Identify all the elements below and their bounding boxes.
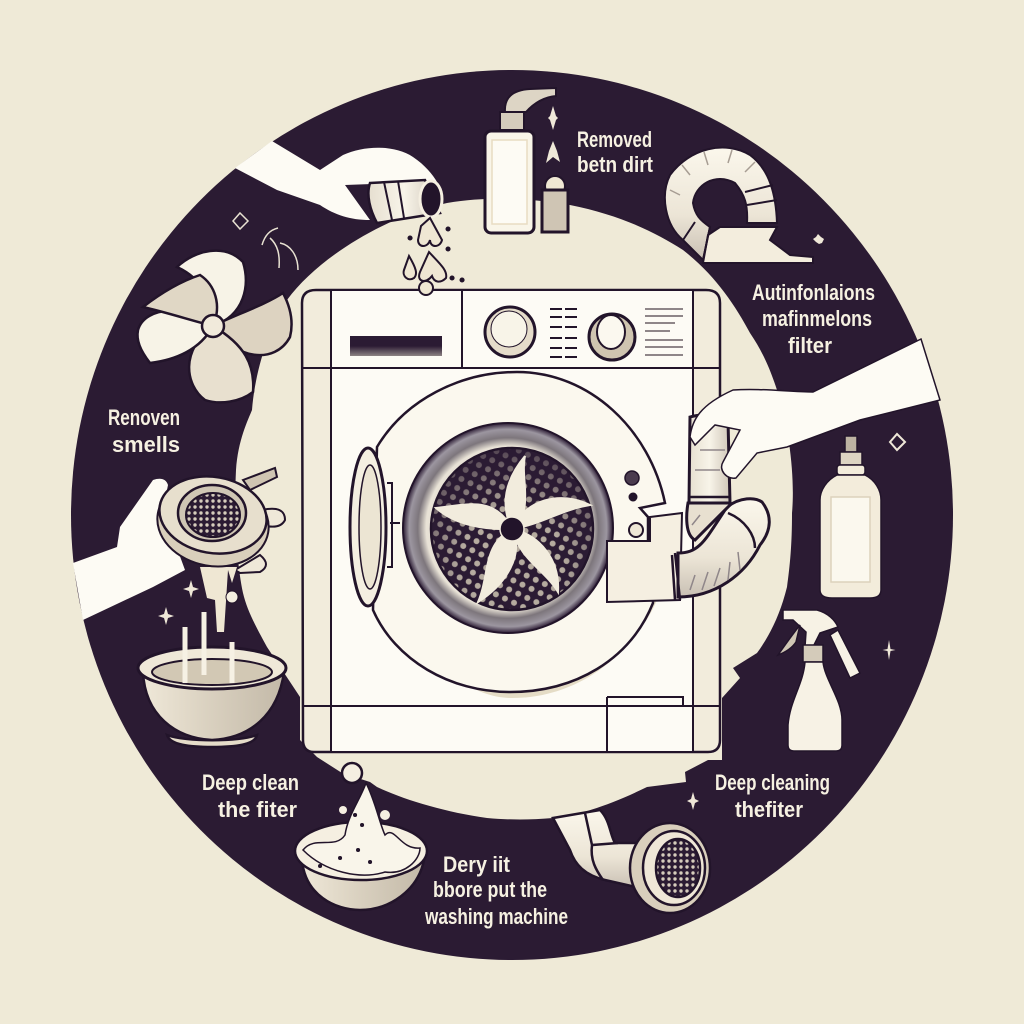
icon: coiled hose top right [665, 148, 813, 263]
label: removes smells: Renoven [108, 405, 180, 430]
hand: right holding hose [690, 339, 940, 478]
icon: bowl with water [138, 612, 286, 747]
label: dry it: bbore put the [433, 877, 547, 902]
water drops [404, 218, 462, 295]
label: deep cleaning the filter: Deep cleaning [715, 770, 830, 795]
dark circular ring [71, 70, 953, 960]
icon: foam bowl [295, 763, 427, 910]
icon: pipe with filter [553, 810, 710, 913]
label: malfunctions filter: mafinmelons [762, 306, 872, 331]
washing machine [302, 290, 720, 752]
control knobs [485, 307, 683, 360]
label: removed dirt: Removed [577, 127, 652, 152]
label: malfunctions filter: Autinfonlaions [752, 280, 875, 305]
label: deep cleaning the filter: thefiter [735, 797, 803, 822]
label: deep clean the filter: Deep clean [202, 770, 299, 795]
label: deep clean the filter [202, 770, 299, 822]
door ring and drum [350, 372, 665, 698]
label: dry it: washing machine [424, 904, 568, 929]
icon: fan impeller [138, 251, 292, 402]
label: removed dirt: betn dirt [577, 152, 654, 177]
sparkles [546, 106, 905, 660]
icon: hand holding filter [73, 468, 285, 632]
sparkle lower right [687, 792, 699, 810]
label: malfunctions filter [752, 280, 875, 358]
drain hose attached to machine [607, 415, 769, 602]
icon: detergent bottle and cup [485, 88, 568, 233]
detergent drawer [350, 336, 442, 356]
label: dry it [424, 852, 568, 929]
icon: spray bottle [778, 610, 860, 751]
label: removes smells [108, 405, 180, 457]
sparkle and arrows upper left [233, 213, 298, 270]
label: dry it: Dery iit [443, 852, 511, 877]
hand: top pouring pipe [235, 141, 442, 223]
label: removes smells: smells [112, 432, 180, 457]
sparkles over bowl [158, 580, 199, 625]
icon: white bottle [820, 436, 881, 598]
label: removed dirt [577, 127, 654, 177]
label: deep clean the filter: the fiter [218, 797, 297, 822]
label: malfunctions filter: filter [788, 333, 832, 358]
label: deep cleaning the filter [715, 770, 830, 822]
